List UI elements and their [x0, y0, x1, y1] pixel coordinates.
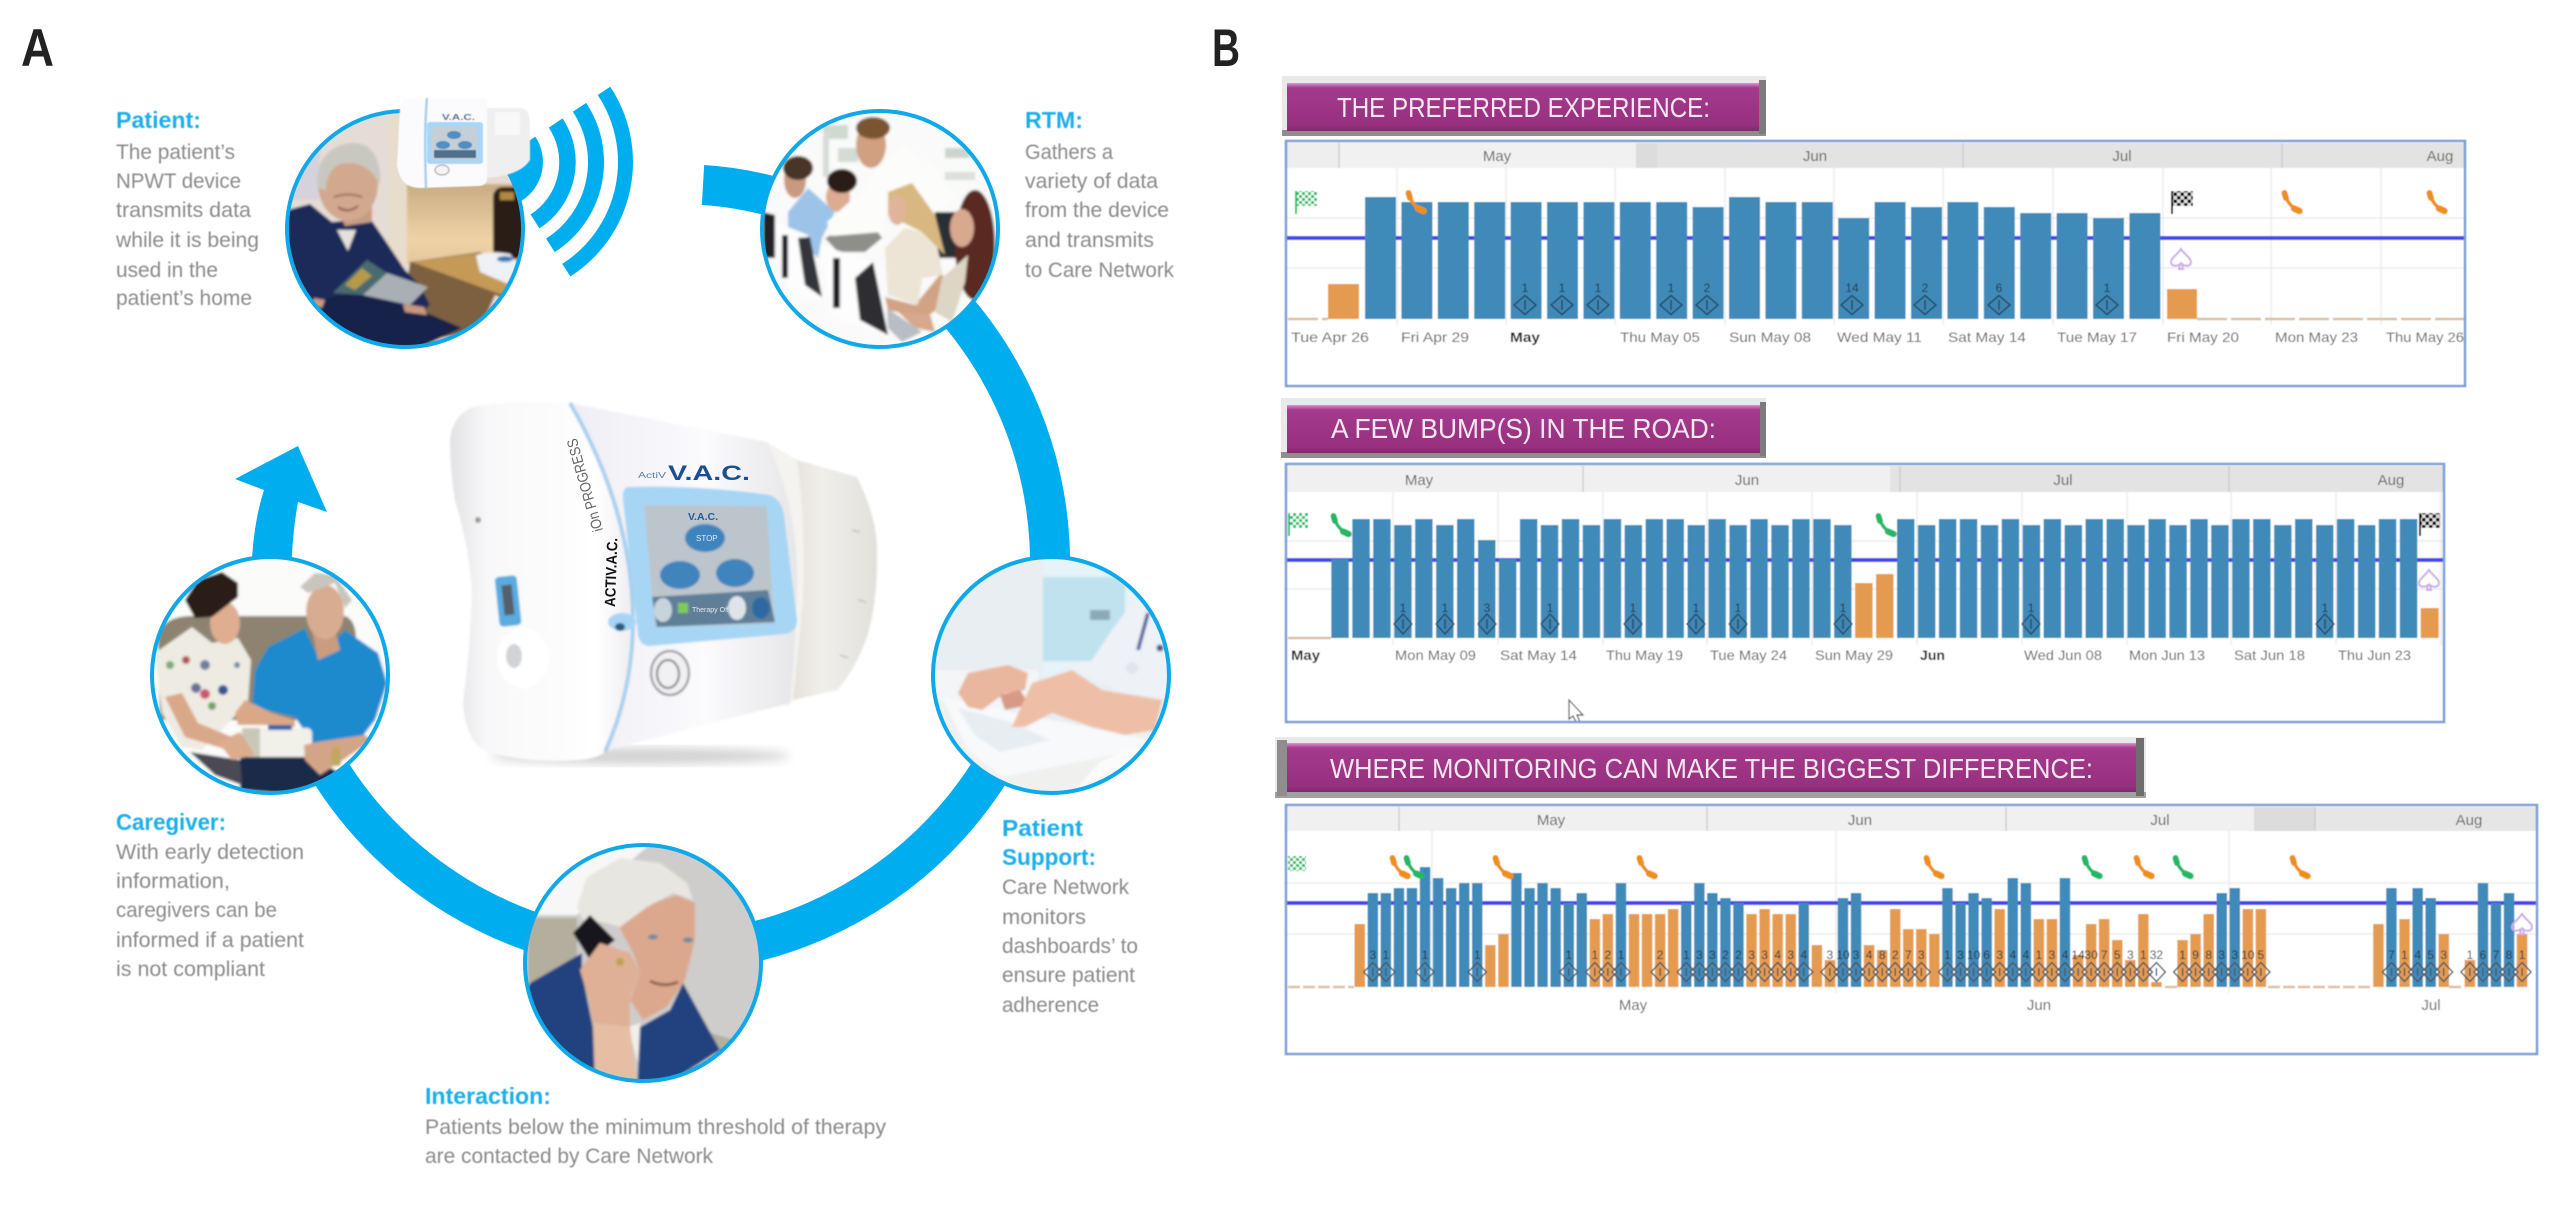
illustration: central therapy unit: [450, 402, 877, 764]
chart: preferred experience timeline: May: [1483, 148, 1512, 165]
alert diamonds: 1: [2519, 948, 2526, 962]
alert diamonds: 2: [1722, 948, 1729, 962]
text block: Patient Support: adherence: [1002, 994, 1099, 1017]
text block: Interaction: Interaction:: [425, 1083, 551, 1109]
alert diamonds: 8: [2506, 948, 2513, 962]
cycle ring arrow: [235, 185, 1050, 953]
alert diamonds: 14: [2071, 948, 2085, 962]
panel letter B: B: [1212, 19, 1240, 78]
icon: black finish flag: [2420, 513, 2440, 536]
alert diamonds: 3: [1996, 948, 2003, 962]
banner: the preferred experience: THE PREFERRED EXPERIENCE:: [1337, 92, 1710, 123]
chart: preferred experience timeline: Jun: [1803, 148, 1827, 165]
alert diamonds: 1: [1735, 601, 1742, 615]
alert diamonds: 1: [1683, 948, 1690, 962]
bars: orange low-use days: [1354, 909, 2527, 987]
text block: Patient Support: Patient: [1002, 815, 1083, 841]
icon: wireless signal: [497, 91, 625, 270]
date axis labels: [1291, 329, 2464, 345]
chart: biggest difference timeline: May: [1537, 812, 1566, 829]
alert diamonds: 3: [1787, 948, 1794, 962]
alert diamonds: 5: [2258, 948, 2265, 962]
text block: RTM: variety of data: [1025, 170, 1158, 193]
date axis labels: Sat May 14: [1500, 647, 1577, 663]
icon: green start flag: [1296, 191, 1317, 214]
date axis labels: Mon May 09: [1395, 647, 1476, 663]
text block: RTM: [1025, 107, 1174, 282]
device brand text: ActiV: [638, 471, 667, 480]
month axis labels: Jun: [2027, 997, 2051, 1014]
alert diamonds: 1: [1693, 601, 1700, 615]
text block: Patient: The patient’s: [116, 141, 235, 164]
text block: Caregiver: information,: [116, 870, 230, 893]
alert diamonds: 4: [1774, 948, 1781, 962]
text block: Patient: used in the: [116, 259, 218, 282]
alert diamonds: 6: [2480, 948, 2487, 962]
text block: Patient Support: Support:: [1002, 844, 1096, 870]
text block: Caregiver: is not compliant: [116, 958, 265, 981]
alert diamonds: 3: [1827, 948, 1834, 962]
alert diamonds: 7: [2101, 948, 2108, 962]
alert diamonds: 8: [2205, 948, 2212, 962]
month axis labels: [1619, 997, 2441, 1014]
device brand text: V.A.C.: [668, 462, 750, 485]
alert diamonds: 4: [2022, 948, 2029, 962]
alert diamonds: 6: [1983, 948, 1990, 962]
alert diamonds: 1: [2036, 948, 2043, 962]
date axis labels: Thu May 26: [2386, 329, 2464, 345]
chart: bumps timeline: Aug: [2378, 472, 2404, 489]
alert diamonds: 2: [1704, 281, 1711, 295]
alert diamonds: 6: [1996, 281, 2003, 295]
chart: bumps timeline: May: [1405, 472, 1434, 489]
date axis labels: Tue May 17: [2057, 329, 2137, 345]
chart frame: [1286, 464, 2444, 722]
alert diamonds: 2: [1892, 948, 1899, 962]
banner: a few bumps in the road: A FEW BUMP(S) IN THE ROAD:: [1331, 413, 1716, 444]
alert diamonds: 4: [2009, 948, 2016, 962]
alert diamonds: 3: [1957, 948, 1964, 962]
banner: where monitoring can make the biggest difference: [1275, 737, 2146, 798]
text block: RTM: to Care Network: [1025, 259, 1174, 282]
alert diamonds: 3: [1696, 948, 1703, 962]
date axis labels: May: [1510, 329, 1540, 345]
alert diamonds: 9: [2192, 948, 2199, 962]
alert diamonds: 1: [1474, 948, 1481, 962]
date axis labels: Thu May 05: [1620, 329, 1700, 345]
alert diamonds: 2: [1922, 281, 1929, 295]
alert diamonds: 3: [2231, 948, 2238, 962]
text block: RTM: from the device: [1025, 199, 1169, 222]
chart frame: [1286, 141, 2465, 386]
alert diamonds: 1: [1944, 948, 1951, 962]
alert diamonds: 1: [1522, 281, 1529, 295]
alert diamonds: 1: [1591, 948, 1598, 962]
date axis labels: Jun: [1920, 647, 1945, 663]
icons: orange phone calls: [1408, 193, 2444, 211]
date axis labels: May: [1291, 647, 1320, 663]
icon: black finish flag: [2172, 191, 2193, 214]
text block: RTM: RTM:: [1025, 107, 1083, 133]
date axis labels: Wed Jun 08: [2024, 647, 2102, 663]
text block: Interaction: are contacted by Care Network: [425, 1145, 713, 1168]
text block: Patient Support: ensure patient: [1002, 964, 1135, 987]
text block: Patient Support: dashboards’ to: [1002, 935, 1138, 958]
alert diamonds: 7: [2493, 948, 2500, 962]
alert diamonds: 1: [1630, 601, 1637, 615]
text block: Caregiver: informed if a patient: [116, 929, 304, 952]
alert diamonds: 1: [1442, 601, 1449, 615]
date axis labels: Thu Jun 23: [2338, 647, 2411, 663]
icon: purple cloud marker: [2419, 570, 2439, 590]
alert diamonds: 10: [1836, 948, 1850, 962]
alert diamonds: 1: [1559, 281, 1566, 295]
alert diamonds: 3: [2127, 948, 2134, 962]
alert diamonds: 3: [1748, 948, 1755, 962]
chart: bumps timeline: [1286, 464, 2444, 722]
alert diamonds: 7: [1905, 948, 1912, 962]
alert diamonds: 10: [1967, 948, 1981, 962]
date axis labels: Wed May 11: [1837, 329, 1922, 345]
alert diamonds: 2: [1657, 948, 1664, 962]
alert diamonds: 1: [1422, 948, 1429, 962]
device brand text: iOn PROGRESS: [564, 437, 607, 534]
device brand text: [564, 437, 750, 614]
alert diamonds: 3: [1484, 601, 1491, 615]
chart frame: [1286, 805, 2537, 1054]
alert diamonds: 4: [1800, 948, 1807, 962]
chart: biggest difference timeline: Aug: [2456, 812, 2482, 829]
alert diamonds: [1364, 948, 2531, 982]
alert diamonds: 10: [2241, 948, 2255, 962]
alert diamonds: 8: [1879, 948, 1886, 962]
text block: Interaction: [425, 1083, 886, 1168]
date axis labels: Thu May 19: [1606, 647, 1683, 663]
date axis labels: Mon Jun 13: [2129, 647, 2205, 663]
alert diamonds: 2: [1605, 948, 1612, 962]
alert diamonds: 3: [1761, 948, 1768, 962]
text block: Caregiver: caregivers can be: [116, 899, 277, 922]
text block: Patient: [115, 107, 259, 310]
device brand text: ACTIV.A.C.: [602, 538, 621, 607]
alert diamonds: 3: [1853, 948, 1860, 962]
alert diamonds: 14: [1845, 281, 1859, 295]
alert diamonds: 1: [1383, 948, 1390, 962]
month axis labels: May: [1619, 997, 1648, 1014]
text block: Patient: transmits data: [116, 199, 251, 222]
date axis labels: Mon May 23: [2275, 329, 2358, 345]
alert diamonds: 1: [2104, 281, 2111, 295]
alert diamonds: 3: [1918, 948, 1925, 962]
banner: the preferred experience: [1282, 76, 1766, 136]
photo: hands typing on keyboard: [928, 552, 1178, 802]
bars: orange low-use days: [1855, 574, 2439, 638]
banner: where monitoring can make the biggest difference: WHERE MONITORING CAN MAKE THE BIGGEST DIFFERENCE:: [1330, 753, 2093, 784]
photo: patient at home: [280, 105, 530, 355]
date axis labels: Sun May 29: [1815, 647, 1893, 663]
date axis labels: [1291, 647, 2411, 663]
banner: a few bumps in the road: [1281, 398, 1766, 458]
chart: biggest difference timeline: [1286, 805, 2537, 1054]
photo: patient on the telephone: [520, 840, 770, 1090]
icons: orange phone calls: [1392, 858, 2308, 876]
alert diamonds: 1: [1618, 948, 1625, 962]
icon: green start flag: [1289, 513, 1308, 536]
text block: Patient Support: [1002, 815, 1138, 1017]
alert diamonds: 5: [2114, 948, 2121, 962]
bars: orange low-use days: [1328, 284, 2197, 319]
bars: blue compliant days: [1331, 519, 2417, 638]
text block: RTM: Gathers a: [1025, 141, 1113, 164]
alert diamonds: 7: [2388, 948, 2395, 962]
alert diamonds: 30: [2084, 948, 2098, 962]
chart: preferred experience timeline: [1286, 141, 2465, 386]
panel A: care cycle: [21, 19, 1178, 1168]
alert diamonds: 1: [2322, 601, 2329, 615]
alert diamonds: 1: [1547, 601, 1554, 615]
icons: green phone calls: [1334, 516, 1894, 534]
bars: blue compliant days: [1368, 867, 2514, 987]
panel B: monitoring timelines: [1212, 19, 2537, 1054]
text block: Caregiver: With early detection: [116, 841, 304, 864]
alert diamonds: 4: [1866, 948, 1873, 962]
alert diamonds: 1: [2028, 601, 2035, 615]
bars: blue compliant days: [1365, 197, 2160, 319]
text block: Patient Support: monitors: [1002, 906, 1086, 929]
date axis labels: Tue Apr 26: [1291, 329, 1369, 345]
text block: Interaction: Patients below the minimum threshold of therapy: [425, 1116, 886, 1139]
alert diamonds: 1: [2140, 948, 2147, 962]
alert diamonds: 1: [1565, 948, 1572, 962]
text block: Caregiver: [116, 809, 304, 981]
illustration: small therapy device: [397, 98, 530, 188]
photo: caregiver with patient: [145, 550, 395, 800]
alert diamonds: 1: [1668, 281, 1675, 295]
icon: green start flag: [1288, 856, 1306, 871]
alert diamonds: 4: [2414, 948, 2421, 962]
alert diamonds: [1394, 601, 2334, 634]
alert diamonds: 3: [2049, 948, 2056, 962]
text block: Patient Support: Care Network: [1002, 876, 1129, 899]
alert diamonds: 3: [1369, 948, 1376, 962]
date axis labels: Fri Apr 29: [1401, 329, 1469, 345]
date axis labels: Sat Jun 18: [2234, 647, 2305, 663]
alert diamonds: 1: [2401, 948, 2408, 962]
alert diamonds: 1: [1400, 601, 1407, 615]
text block: Patient: patient’s home: [116, 287, 252, 310]
alert diamonds: 5: [2427, 948, 2434, 962]
alert diamonds: 32: [2150, 948, 2163, 962]
alert diamonds: 3: [2218, 948, 2225, 962]
photo: call centre staff: [755, 105, 1005, 355]
text block: Patient: while it is being: [115, 229, 259, 252]
text block: Patient: NPWT device: [116, 170, 241, 193]
device brand text: V.A.C.: [688, 512, 718, 523]
icons: green phone calls: [1406, 858, 2190, 876]
alert diamonds: 1: [1840, 601, 1847, 615]
text block: Patient: Patient:: [116, 107, 201, 133]
alert diamonds: 3: [2440, 948, 2447, 962]
text block: RTM: and transmits: [1025, 229, 1154, 252]
chart: bumps timeline: Jul: [2053, 472, 2073, 489]
chart: preferred experience timeline: Aug: [2427, 148, 2453, 165]
month axis labels: Jul: [2421, 997, 2441, 1014]
alert diamonds: 1: [2179, 948, 2186, 962]
illustration: small therapy device: V.A.C.: [442, 112, 475, 122]
alert diamonds: [1514, 281, 2118, 314]
alert diamonds: 1: [2467, 948, 2474, 962]
date axis labels: Sat May 14: [1948, 329, 2026, 345]
device brand text: Therapy Off: [692, 607, 729, 614]
icon: mouse cursor: [1569, 700, 1583, 722]
date axis labels: Sun May 08: [1729, 329, 1811, 345]
date axis labels: Fri May 20: [2167, 329, 2239, 345]
alert diamonds: 4: [2062, 948, 2069, 962]
chart: preferred experience timeline: Jul: [2112, 148, 2132, 165]
text block: Caregiver: Caregiver:: [116, 809, 226, 835]
chart: bumps timeline: Jun: [1735, 472, 1759, 489]
alert diamonds: 3: [1709, 948, 1716, 962]
icon: purple cloud marker: [2171, 249, 2191, 269]
panel letter A: A: [21, 19, 54, 78]
chart: biggest difference timeline: Jul: [2150, 812, 2170, 829]
chart: biggest difference timeline: Jun: [1848, 812, 1872, 829]
alert diamonds: 2: [1735, 948, 1742, 962]
icon: purple cloud marker: [2512, 914, 2532, 934]
device brand text: STOP: [696, 534, 718, 543]
alert diamonds: 1: [1595, 281, 1602, 295]
date axis labels: Tue May 24: [1710, 647, 1787, 663]
